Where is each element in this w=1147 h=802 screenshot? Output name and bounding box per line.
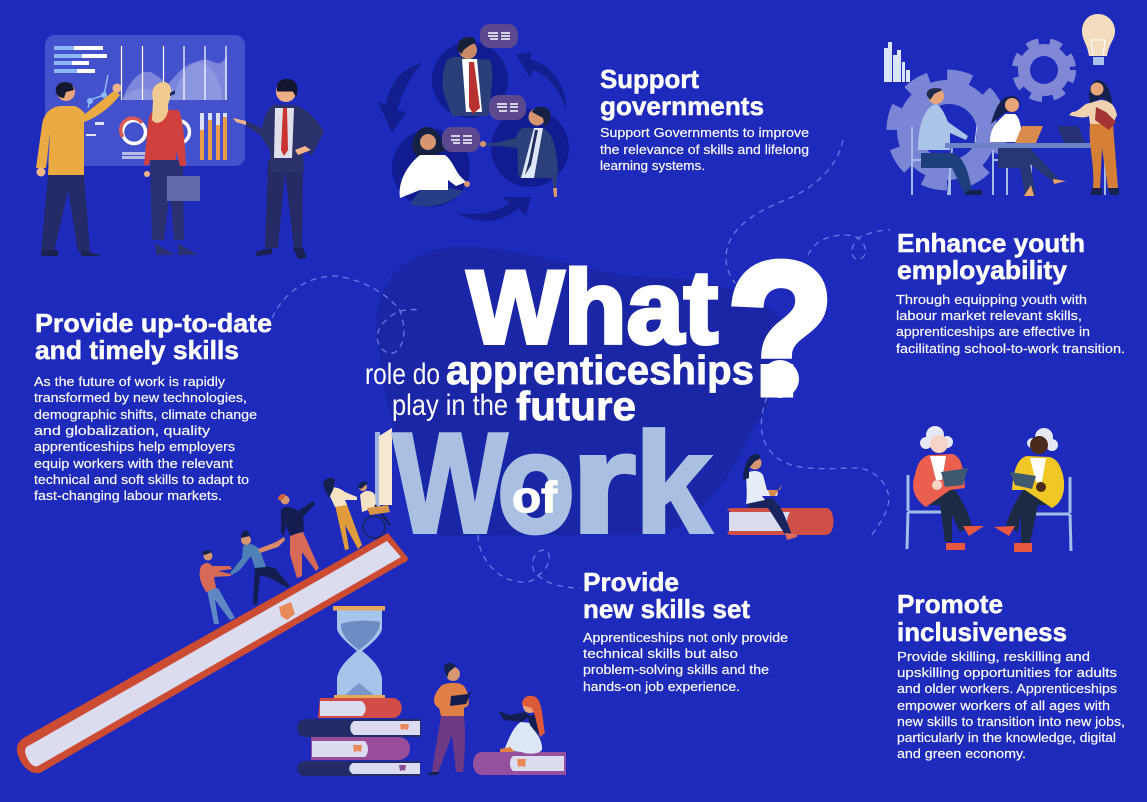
title word: Work: W (393, 404, 507, 563)
text: provide up-to-date body: and globalization, quality (34, 423, 211, 438)
text: provide up-to-date body: technical and soft skills to adapt to (34, 472, 249, 487)
figure: senior in coral (913, 426, 984, 550)
figure: person in navy (278, 494, 319, 578)
figure: woman in white (400, 127, 470, 206)
heading: promote inclusiveness: Promote (897, 589, 1003, 619)
table and chairs (912, 127, 1105, 195)
heading: enhance youth employability: employability (897, 255, 1068, 285)
heading: support governments: Support (600, 64, 699, 94)
central blob (376, 247, 784, 536)
text: promote inclusiveness body: new skills to transition into new jobs, (897, 714, 1125, 729)
text: provide up-to-date body: fast-changing labour markets. (34, 488, 222, 503)
icon: hourglass (333, 606, 385, 699)
title mark: question mark: ? (728, 226, 833, 433)
heading: provide new skills set: Provide (583, 567, 679, 597)
panel: woman reading on red book (727, 454, 834, 540)
figure: seated girl reading (498, 696, 545, 754)
figure: seated woman (990, 96, 1066, 196)
title word: Work: k (635, 404, 712, 563)
heading: provide up-to-date skills: Provide up-to-date (35, 308, 272, 338)
figure: woman in red top (144, 82, 200, 255)
chair right (1036, 477, 1071, 551)
figure: standing woman reading (427, 663, 472, 775)
icon: large gear (893, 76, 1001, 184)
text: support governments body: Support Governments to improve (600, 125, 809, 140)
text: provide up-to-date body: demographic shifts, climate change (34, 407, 257, 422)
title line: play in the future: play in the (392, 389, 508, 422)
text: enhance youth body: facilitating school-to-work transition. (896, 341, 1125, 356)
text: provide new skills body: technical skills but also (583, 646, 738, 661)
title word: Work: o (497, 404, 575, 563)
text: provide up-to-date body: transformed by new technologies, (34, 390, 247, 405)
text: provide new skills body: Apprenticeships not only provide (583, 630, 788, 645)
stacked books (297, 698, 421, 776)
panel: support governments illustration (378, 24, 569, 221)
title: What role do apprenticeships play in the future of Work? (365, 226, 833, 563)
title word: of: of (512, 473, 557, 522)
heading: provide up-to-date skills: and timely skills (35, 335, 239, 365)
book under seated girl (473, 752, 566, 775)
panel: climbers on slanted book (17, 478, 408, 773)
text: promote inclusiveness body: Provide skilling, reskilling and (897, 649, 1090, 664)
figure: woman in cream and orange (323, 478, 362, 550)
figure: senior in yellow (994, 428, 1064, 552)
figure: man in coral (200, 550, 235, 624)
text: promote inclusiveness body: empower workers of all ages with (897, 698, 1110, 713)
text: provide up-to-date body: As the future of work is rapidly (34, 374, 226, 389)
icon: small gear (1016, 42, 1072, 98)
heading: provide new skills set: new skills set (583, 594, 750, 624)
icon: circular arrows (378, 52, 566, 221)
text: provide up-to-date body: equip workers with the relevant (34, 456, 233, 471)
text: promote inclusiveness body: particularly in the knowledge, digital (897, 730, 1116, 745)
text: provide up-to-date body: apprenticeships help employers (34, 439, 236, 454)
figure: person in wheelchair (358, 481, 390, 538)
title line: role do apprenticeships: apprenticeships (446, 347, 754, 393)
text: support governments body: learning systems. (600, 158, 705, 173)
text: promote inclusiveness body: and older workers. Apprenticeships (897, 681, 1118, 696)
heading: support governments: governments (600, 91, 764, 121)
slanted book (17, 533, 408, 773)
chair left (907, 475, 942, 549)
title word: What: What (467, 250, 718, 366)
title word: Work: r (571, 404, 636, 563)
speech bubbles (442, 24, 526, 152)
heading: enhance youth employability: Enhance youth (897, 228, 1085, 258)
text: provide new skills body: hands-on job experience. (583, 679, 740, 694)
figure: man right (480, 107, 558, 197)
figure: person in blue (230, 530, 290, 605)
panel: senior women reading (907, 426, 1071, 552)
icon: light bulb (1082, 14, 1115, 65)
text: provide new skills body: problem-solving skills and the (583, 662, 769, 677)
icon: bar chart (884, 42, 910, 82)
text: promote inclusiveness body: upskilling opportunities for adults (897, 665, 1118, 680)
heading: promote inclusiveness: inclusiveness (897, 617, 1067, 647)
laptops (1015, 126, 1043, 143)
figure: man top (442, 37, 492, 116)
text: enhance youth body: labour market relevant skills, (896, 308, 1082, 323)
panel: youth team illustration (884, 14, 1119, 196)
door (375, 428, 392, 508)
title line: role do apprenticeships: role do (365, 358, 440, 391)
text: support governments body: the relevance of skills and lifelong (600, 142, 809, 157)
table top (945, 143, 1111, 148)
figure: man in orange sweater (36, 82, 122, 256)
text: enhance youth body: apprenticeships are effective in (896, 324, 1090, 339)
figure: standing woman (1069, 80, 1119, 195)
figure: man at laptop (918, 88, 982, 195)
text: enhance youth body: Through equipping youth with (896, 292, 1087, 307)
title line: play in the future: future (516, 383, 636, 429)
figure: man in navy suit (233, 79, 324, 259)
panel: hourglass on books (297, 606, 566, 776)
panel: data presentation illustration (36, 35, 324, 259)
text: promote inclusiveness body: and green economy. (897, 746, 1026, 761)
